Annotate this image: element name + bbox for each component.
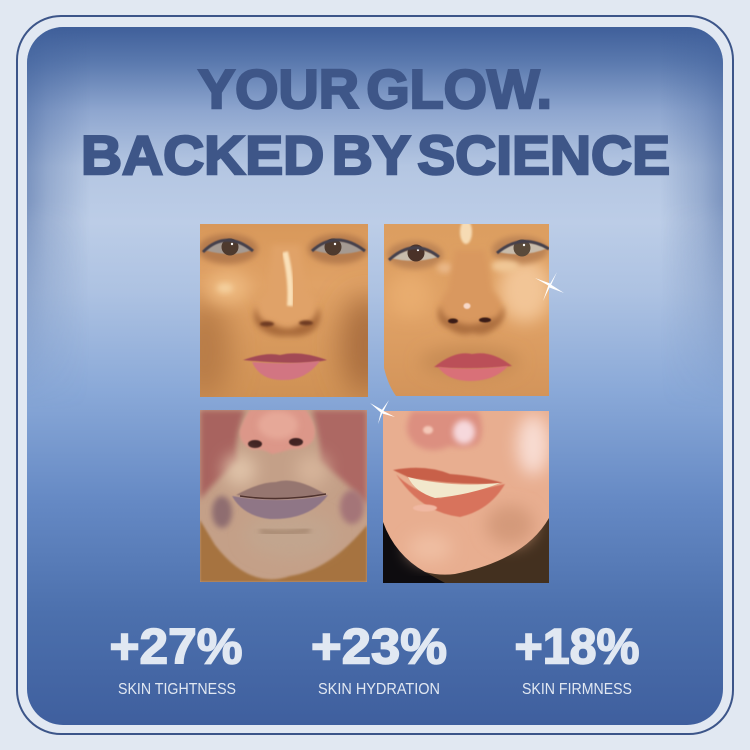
stat: skin firmness [514,618,640,698]
eye socket shadows [198,234,258,264]
eye socket shadows [387,241,443,269]
nose [442,264,504,320]
stat: skin hydration [311,618,447,698]
stat value: +23% [311,618,447,674]
photo grid [179,220,551,583]
stat value: +18% [514,618,640,674]
lips [434,353,512,368]
stat label: SKIN HYDRATION [318,681,440,698]
photo: before, upper face [200,224,368,397]
cheek tones [517,415,549,475]
title line 1: YOUR GLOW. [198,58,552,120]
nose [276,248,296,324]
lips [243,353,327,363]
photo: after, lower face [383,411,549,583]
lips [393,468,503,484]
sparkle: upper right [535,272,564,301]
stat: skin tightness [110,618,242,698]
stat label: SKIN FIRMNESS [522,681,632,698]
stat value: +27% [110,618,242,674]
dark hair and background [425,518,549,583]
brow highlights [460,220,472,244]
upper lip area highlights [224,454,256,486]
nose [240,410,315,454]
photo: after, upper face [384,220,551,397]
nose [407,411,482,450]
photo: before, lower face [200,410,367,582]
eyes [390,250,438,261]
teeth [408,477,500,498]
eyes [204,241,252,254]
sparkle: center [370,400,395,424]
reddish cheeks [200,410,245,500]
stat label: SKIN TIGHTNESS [118,681,236,698]
title [81,58,670,186]
title line 2: BACKED BY SCIENCE [81,124,670,186]
chin shading [245,513,335,557]
lips [236,480,325,498]
neck corners [200,520,367,582]
